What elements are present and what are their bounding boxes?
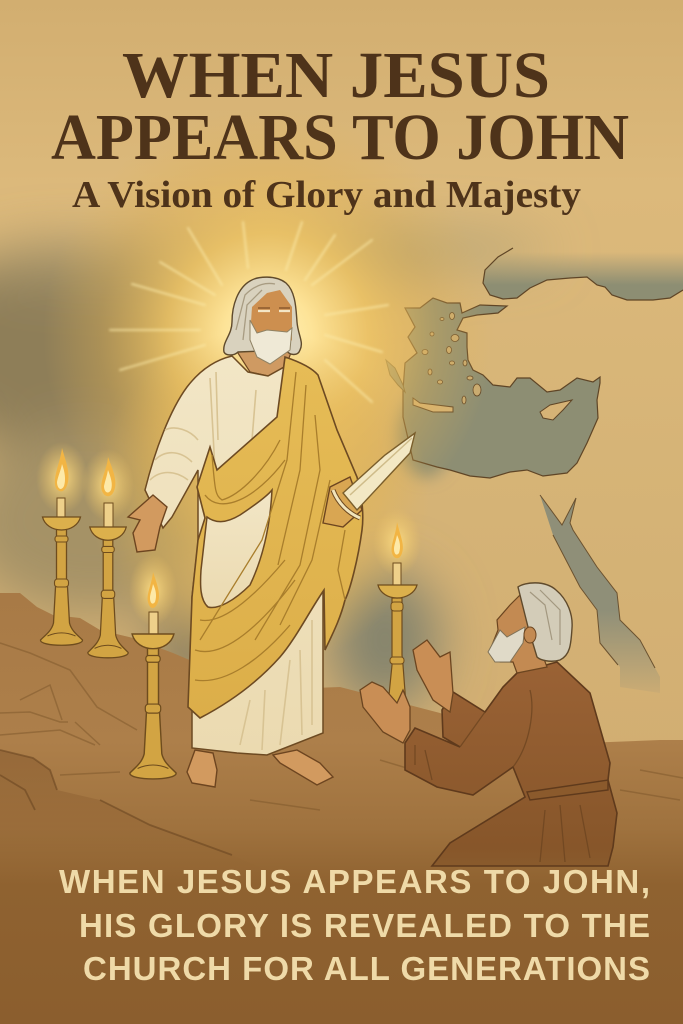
title: APPEARS TO JOHN xyxy=(51,101,629,174)
map: Cyprus xyxy=(540,400,572,420)
face xyxy=(250,290,292,363)
map: Black Sea xyxy=(483,248,683,300)
ear xyxy=(524,627,536,643)
map: Aegean islands xyxy=(422,312,481,404)
robe fold lines xyxy=(150,372,312,750)
beard xyxy=(250,320,292,364)
bottom message: WHEN JESUS APPEARS TO JOHN, xyxy=(59,863,650,900)
map: Red Sea xyxy=(540,495,660,693)
bottom message: HIS GLORY IS REVEALED TO THE xyxy=(79,907,650,944)
storm clouds xyxy=(0,236,550,710)
hair xyxy=(224,277,301,355)
white chest patch xyxy=(201,490,272,608)
candle 4 xyxy=(373,508,421,705)
map: soft left edge of sea xyxy=(397,393,453,477)
body glow xyxy=(90,330,430,670)
eyes xyxy=(258,310,290,312)
subtitle: A Vision of Glory and Majesty xyxy=(72,174,581,216)
neck and face xyxy=(490,595,547,673)
bottom message: CHURCH FOR ALL GENERATIONS xyxy=(83,950,650,987)
lower hand xyxy=(360,682,410,743)
candle 1 xyxy=(36,442,88,645)
left hand xyxy=(128,495,167,552)
ground: hills xyxy=(0,593,683,1024)
right foot xyxy=(273,750,333,785)
belt xyxy=(527,780,608,800)
halo glow xyxy=(43,110,493,560)
beard xyxy=(488,627,525,662)
robe xyxy=(145,356,323,755)
figure: Jesus xyxy=(128,277,415,787)
left foot xyxy=(187,750,217,787)
map: Crete xyxy=(413,398,453,412)
candle 2 xyxy=(82,449,134,658)
lampstands xyxy=(36,442,421,779)
golden sash xyxy=(188,357,363,718)
hair strands xyxy=(236,283,275,340)
map: Aegean and Mediterranean xyxy=(403,298,600,478)
brown robe xyxy=(405,662,617,866)
title: WHEN JESUS xyxy=(122,39,550,112)
right hand xyxy=(323,477,362,527)
figure: kneeling John xyxy=(360,583,617,866)
map: Greece, Asia Minor and the Sea xyxy=(386,248,683,693)
sword xyxy=(333,433,415,518)
candle 3 xyxy=(129,554,177,779)
title xyxy=(51,39,629,174)
upper hand xyxy=(413,640,453,712)
hair xyxy=(518,583,572,661)
sash fold lines xyxy=(195,372,345,681)
halo rays xyxy=(110,222,388,402)
bottom message xyxy=(59,863,650,987)
neck xyxy=(236,350,292,376)
